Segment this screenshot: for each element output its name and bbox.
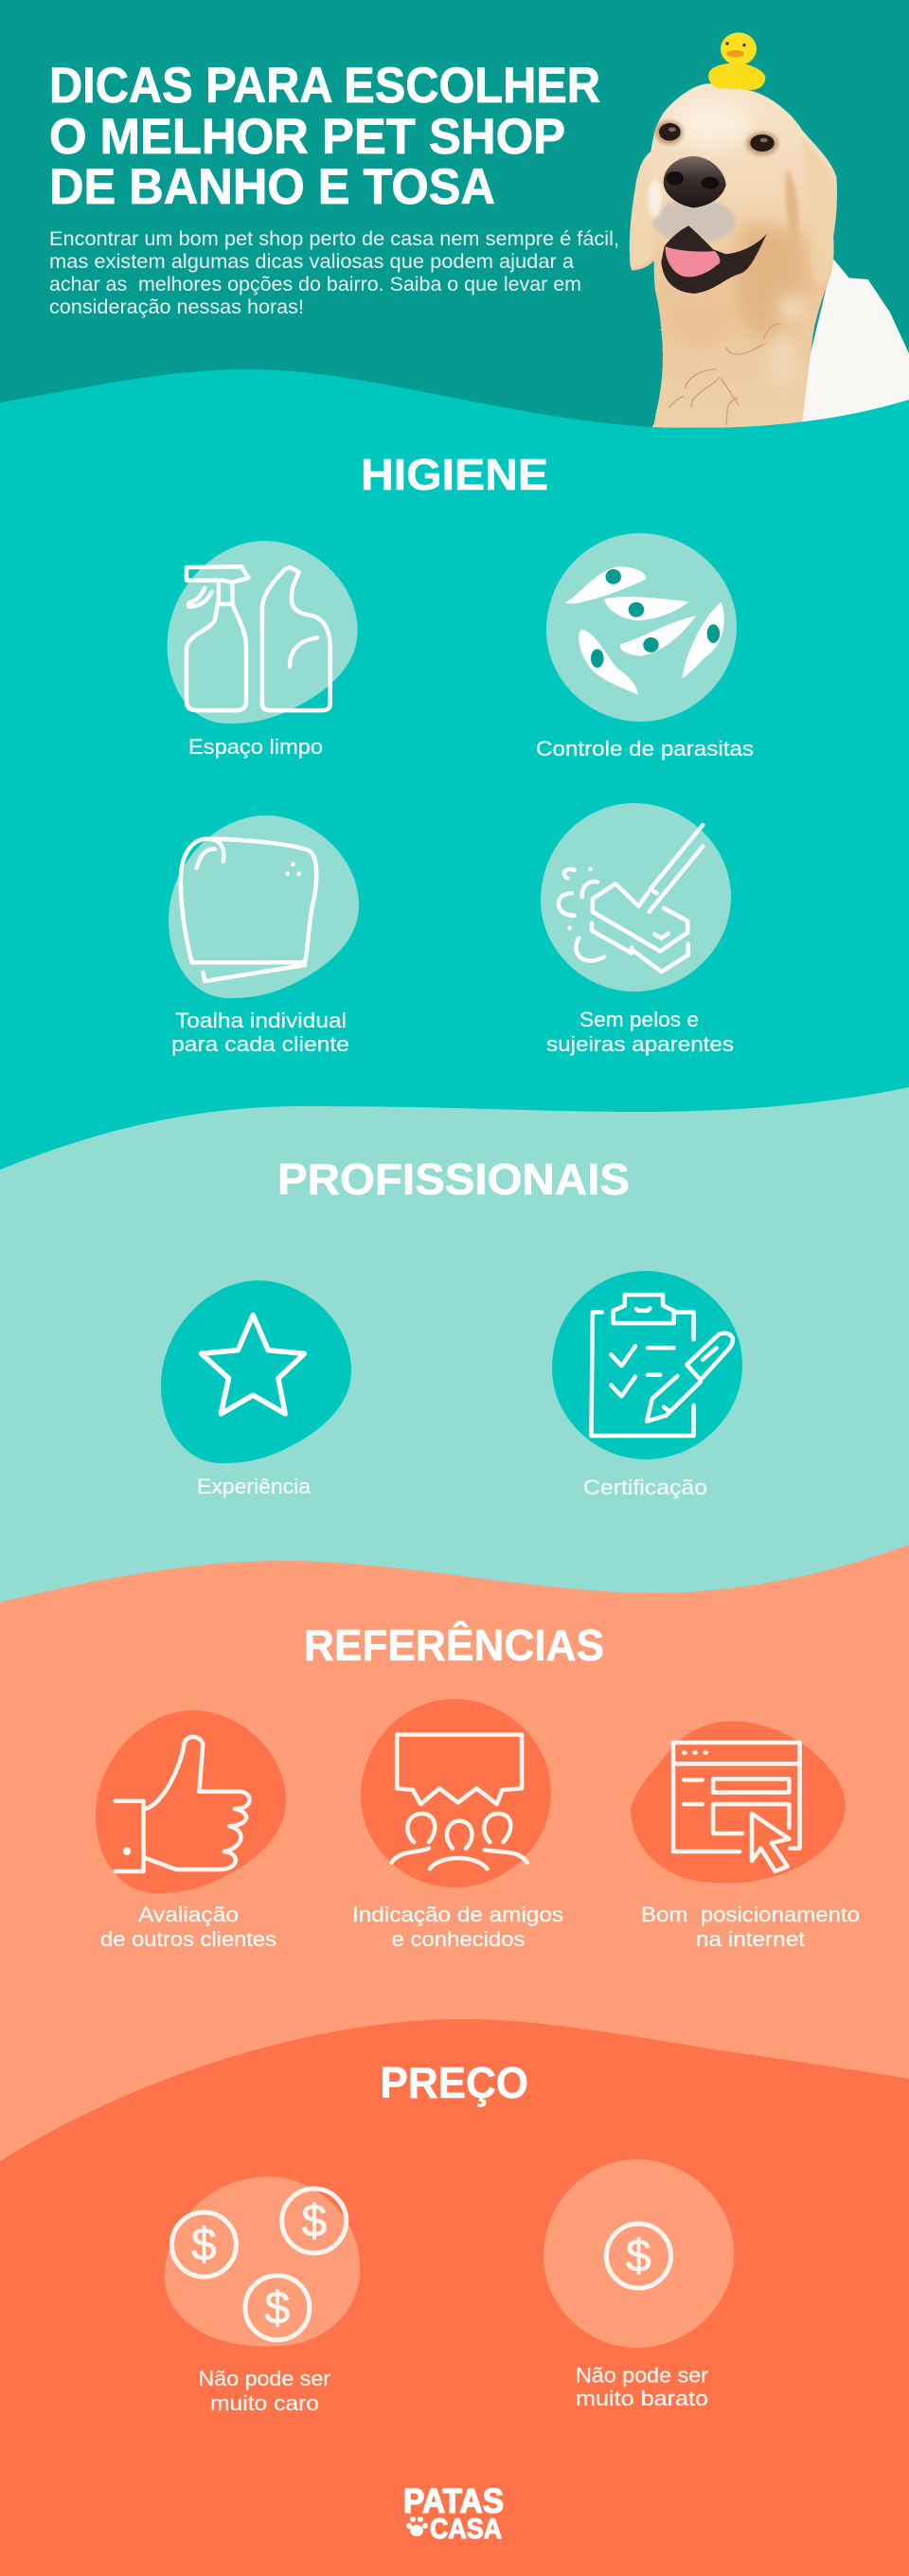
icon: parasites [565, 566, 724, 695]
item: certificação [552, 1271, 742, 1499]
item: não pode ser muito barato [544, 2159, 734, 2410]
icon: broom [559, 825, 703, 972]
heading: preço: PREÇO [381, 2058, 528, 2107]
icon: paw [406, 2516, 428, 2536]
label [171, 1009, 349, 1056]
title: DE BANHO E TOSA [49, 159, 495, 215]
panel: profissionais [0, 1087, 909, 1610]
intro paragraph: consideração nessas horas! [49, 296, 304, 318]
item: espaço limpo [168, 541, 358, 759]
intro paragraph [49, 228, 619, 318]
icon: towel [181, 839, 316, 981]
label: sujeiras aparentes [546, 1032, 734, 1056]
label: Bom posicionamento [641, 1903, 860, 1926]
label [641, 1903, 860, 1951]
item: controle de parasitas [536, 533, 754, 760]
label: Indicação de amigos [352, 1903, 563, 1926]
icon: star [201, 1315, 305, 1414]
label [352, 1903, 563, 1951]
item: indicação de amigos [352, 1699, 563, 1951]
icon: thumbs up [116, 1737, 250, 1871]
logo: patas da casa: CASA [430, 2513, 502, 2545]
item: toalha individual [169, 815, 359, 1056]
heading: referências: REFERÊNCIAS [304, 1620, 604, 1670]
label: muito caro [210, 2391, 319, 2415]
icon: people with speech bubble [392, 1735, 527, 1869]
icon: clipboard and pen [591, 1295, 733, 1436]
panel: preço [0, 2019, 909, 2576]
title: DICAS PARA ESCOLHER [49, 58, 600, 114]
label: Não pode ser [576, 2364, 708, 2387]
label: Experiência [197, 1475, 312, 1498]
intro paragraph: achar as melhores opções do bairro. Saiba o que levar em [49, 274, 581, 295]
icon: single coin [606, 2224, 670, 2288]
item: avaliação de outros clientes [96, 1710, 286, 1951]
label: de outros clientes [100, 1927, 276, 1951]
label: Certificação [583, 1476, 707, 1499]
logo: patas da casa [403, 2481, 504, 2545]
panel: referências [0, 1545, 909, 2169]
label: para cada cliente [171, 1032, 349, 1056]
intro paragraph: Encontrar um bom pet shop perto de casa nem sempre é fácil, [49, 228, 619, 250]
intro paragraph: mas existem algumas dicas valiosas que podem ajudar a [49, 251, 574, 273]
label [576, 2364, 708, 2410]
label [199, 2367, 330, 2415]
label [546, 1008, 734, 1056]
title [49, 58, 600, 215]
icon: single coin: $ [626, 2231, 651, 2281]
icon: three coins: $ [191, 2220, 217, 2270]
item: sem pelos e sujeiras [541, 803, 734, 1056]
label: Não pode ser [199, 2367, 330, 2390]
icon: three coins: $ [265, 2283, 290, 2334]
label: e conhecidos [392, 1927, 525, 1951]
label [100, 1903, 276, 1951]
icon: three coins [171, 2189, 347, 2340]
logo: patas da casa: PATAS [403, 2481, 504, 2520]
label: Toalha individual [175, 1009, 347, 1032]
label: Sem pelos e [579, 1008, 699, 1031]
label: Espaço limpo [188, 735, 323, 759]
label: Avaliação [138, 1903, 239, 1926]
item: bom posicionamento na internet [631, 1721, 860, 1951]
item: não pode ser muito caro [165, 2176, 360, 2415]
label: muito barato [576, 2387, 708, 2410]
heading: higiene: HIGIENE [361, 450, 548, 499]
panel: header [0, 0, 909, 436]
icon: rubber duck [708, 32, 765, 90]
photo: dog with rubber duck on head [630, 32, 909, 429]
panel: higiene [0, 369, 909, 1174]
title: O MELHOR PET SHOP [49, 109, 565, 165]
label: Controle de parasitas [536, 737, 754, 760]
icon: cleaning bottles [187, 566, 330, 710]
icon: three coins: $ [301, 2196, 327, 2246]
heading: profissionais: PROFISSIONAIS [277, 1154, 630, 1204]
label: na internet [696, 1927, 805, 1951]
icon: browser window with cursor [673, 1743, 800, 1871]
item: experiência [161, 1280, 351, 1498]
